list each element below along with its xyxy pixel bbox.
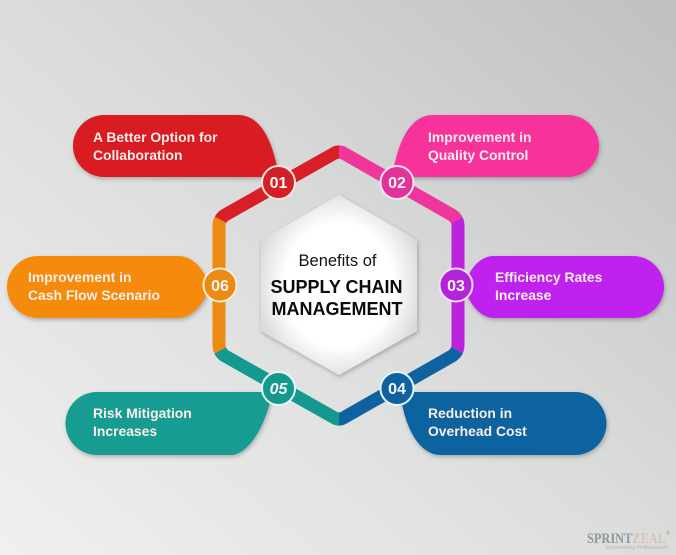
panel: 01 collaboration	[73, 115, 279, 177]
panel: 05 risk mitigation	[66, 392, 272, 455]
badge 02: 02	[388, 175, 406, 192]
badge 03	[440, 268, 472, 302]
badge 04	[380, 372, 414, 405]
panel: 01 collaboration: A Better Option for	[93, 129, 218, 145]
panel: 02 quality control	[392, 115, 599, 177]
central title: SUPPLY CHAIN	[270, 277, 403, 297]
badge 06	[204, 268, 236, 302]
badge 05: 05	[270, 381, 288, 398]
badge 01: 01	[270, 175, 288, 192]
badge 03: 03	[447, 278, 465, 295]
panel: 05 risk mitigation: Risk Mitigation	[93, 405, 192, 421]
badge 02	[380, 166, 414, 199]
panel: 02 quality control: Quality Control	[428, 147, 528, 163]
logo: Sprintzeal: Empowering Professionals	[606, 545, 669, 551]
panel: 04 overhead cost	[400, 392, 606, 455]
panel: 04 overhead cost: Overhead Cost	[428, 423, 527, 439]
badge 04: 04	[388, 381, 406, 398]
panel: 03 efficiency: Increase	[495, 287, 552, 303]
panel: 03 efficiency	[464, 256, 664, 318]
badge 01	[262, 166, 295, 199]
central title: Benefits of	[299, 252, 377, 270]
central hexagon panel	[261, 195, 417, 375]
panel: 04 overhead cost: Reduction in	[428, 405, 512, 421]
badge 05	[262, 372, 295, 405]
panel: 03 efficiency: Efficiency Rates	[495, 269, 603, 285]
panel: 01 collaboration: Collaboration	[93, 147, 183, 163]
central title	[270, 252, 403, 319]
panel: 02 quality control: Improvement in	[428, 129, 531, 145]
panel: 06 cash flow: Improvement in	[28, 269, 131, 285]
logo: Sprintzeal: SPRINTZEAL	[587, 531, 666, 547]
logo: Sprintzeal: ®	[666, 530, 671, 537]
panel: 06 cash flow: Cash Flow Scenario	[28, 287, 160, 303]
hexagonal ring	[219, 152, 458, 419]
panel: 05 risk mitigation: Increases	[93, 423, 157, 439]
badge 06: 06	[211, 278, 229, 295]
panel: 06 cash flow	[7, 256, 210, 318]
central title: MANAGEMENT	[272, 299, 402, 319]
